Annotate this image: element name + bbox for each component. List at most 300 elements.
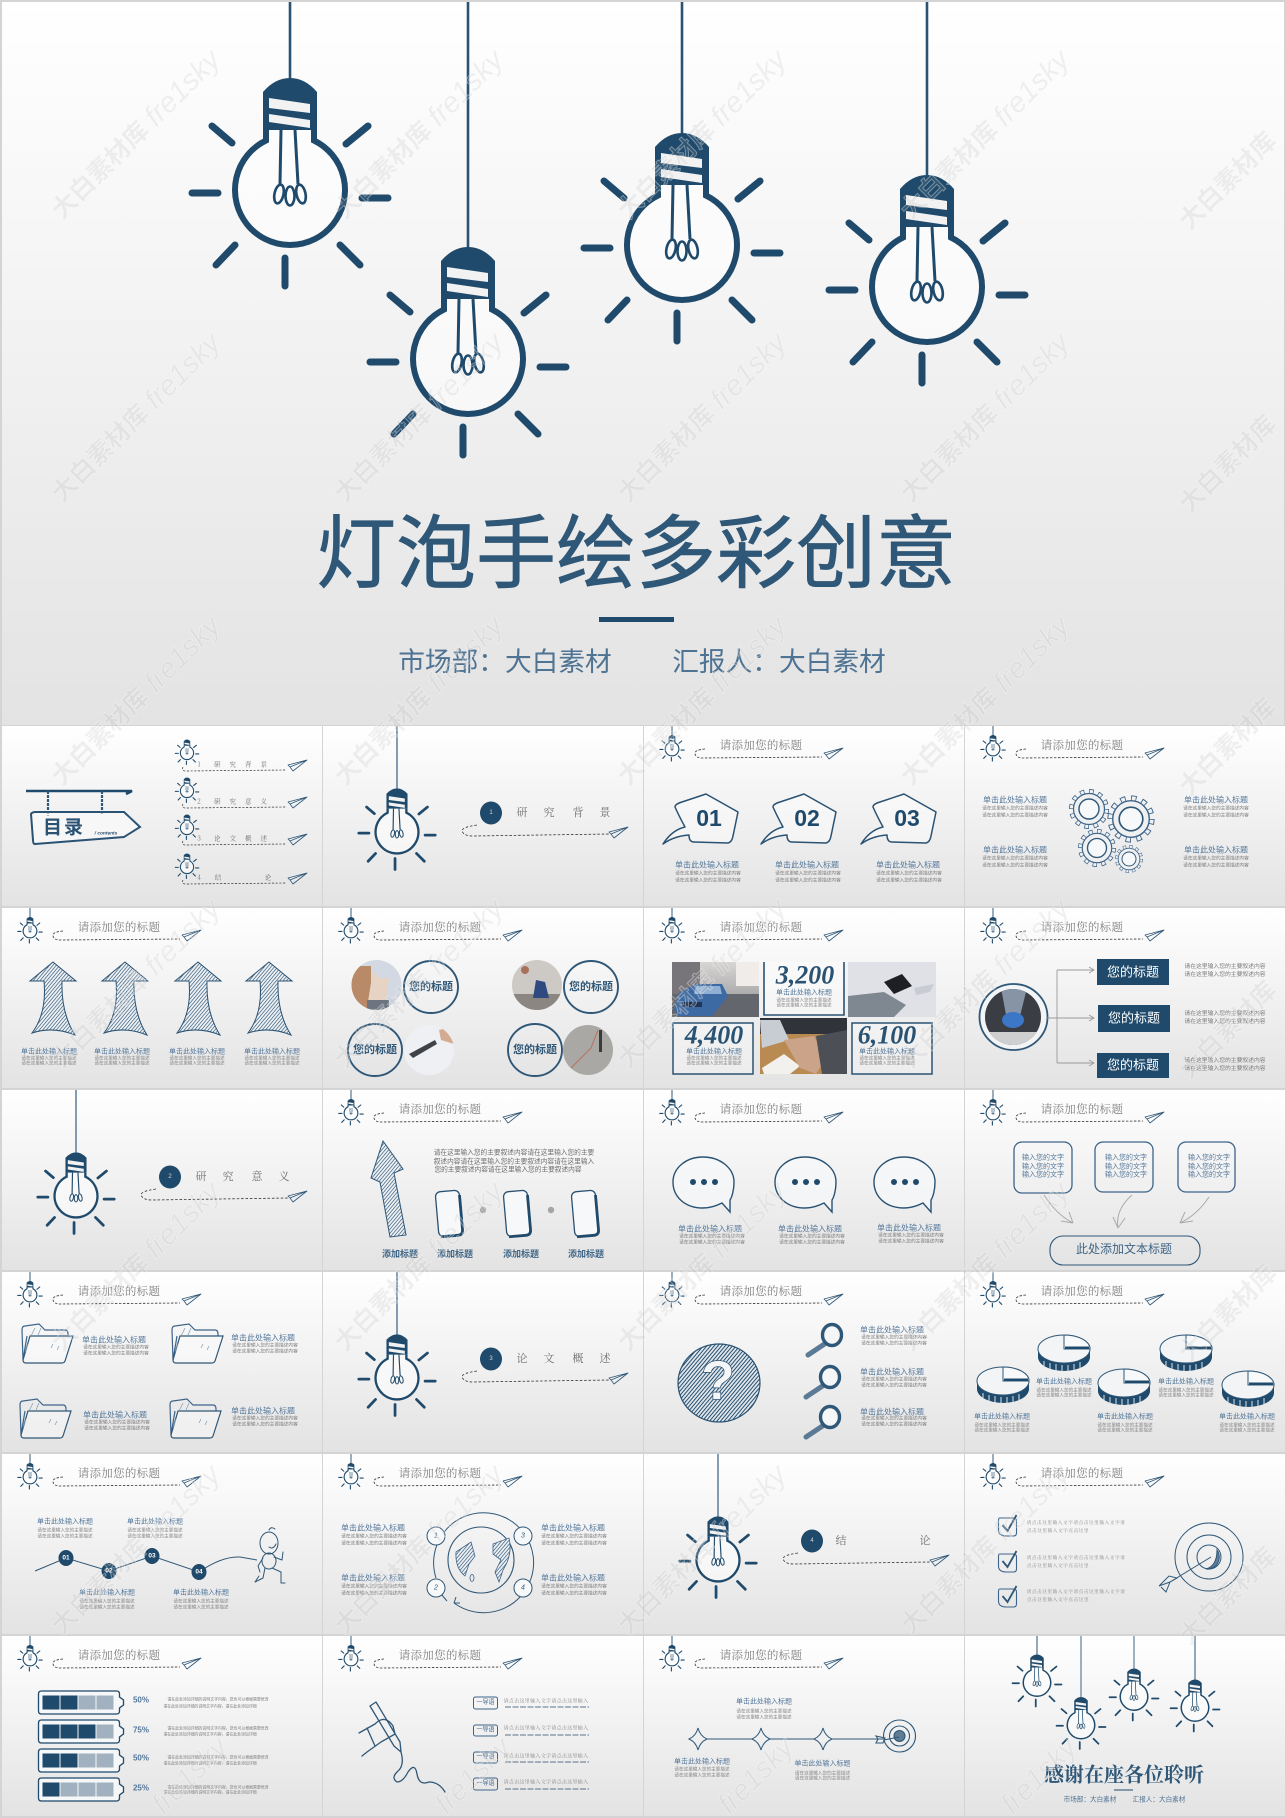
diamond 3 (814, 1728, 832, 1750)
text block 1: 请在这里输入您的主要描述内容 (83, 1350, 149, 1356)
pie text 2: 请在这里输入您的主要描述 (1036, 1392, 1092, 1398)
pie text 1: 请在这里输入您的主要描述 (974, 1422, 1030, 1428)
pie 4 (1160, 1335, 1212, 1371)
text block top: 单击此处输入标题 (736, 1696, 792, 1706)
battery descriptions: 请在此处添加详细的说明文字内容，您也可以根据需要修改 (167, 1696, 269, 1702)
shape 03: 03 (894, 805, 920, 831)
title box 1 (1097, 959, 1169, 985)
pie text 4: 单击此处输入标题 (1158, 1376, 1214, 1386)
watermark overlay: fre1sky (146, 1731, 235, 1818)
node 04: 04 (195, 1568, 203, 1576)
section heading (196, 1168, 290, 1184)
photo 2 (512, 960, 562, 1010)
panel: flow with three titles (965, 908, 1285, 1088)
text block 01: 单击此处输入标题 (37, 1516, 93, 1526)
text block 01: 请在这里输入您的主要描述 (37, 1526, 93, 1534)
section heading (836, 1532, 930, 1548)
percent labels: 25% (133, 1784, 149, 1792)
slide heading: 请添加您的标题 (399, 1465, 481, 1481)
tile 3 (571, 1190, 599, 1237)
list item 3: 一导语 (476, 1752, 495, 1760)
panel: photo circles (323, 908, 643, 1088)
description 2: 请在这里输入您的主要叙述内容 (1184, 1009, 1266, 1017)
battery descriptions: 请在此处添加详细的说明文字内容，请在此处添加详细 (163, 1790, 257, 1794)
slide heading: 请添加您的标题 (399, 1647, 481, 1663)
slide heading: 请添加您的标题 (78, 1283, 160, 1299)
list item 1 (175, 740, 307, 771)
photo 1 (351, 960, 403, 1010)
tile labels: 添加标题 (437, 1248, 473, 1259)
text block top: 请在这里输入您的主要描述 (736, 1714, 792, 1720)
icon: bubble 3 (874, 1157, 935, 1212)
title box 2 (1098, 1005, 1170, 1032)
text block bottom left: 单击此处输入标题 (983, 844, 1047, 854)
stat box 3,200: 请在这里输入您的主要描述 (776, 996, 832, 1004)
section heading: 文 (544, 1350, 554, 1366)
title pill: 此处添加文本标题 (1076, 1241, 1172, 1256)
section heading (516, 1350, 610, 1366)
text block 4: 请在这里输入您的主要描述内容 (232, 1414, 298, 1422)
panel: section 2 (2, 1090, 322, 1270)
text block 3 (860, 1406, 927, 1428)
description 1: 请在这里输入您的主要叙述内容 (1184, 962, 1266, 970)
text block 03: 请在这里输入您的主要描述 (127, 1532, 183, 1540)
text block 1: 请在这里输入您的主要描述内容 (861, 1340, 927, 1346)
panel: question mark (644, 1272, 964, 1452)
pie text 2: 单击此处输入标题 (1036, 1376, 1092, 1386)
icon: arrow 4 (246, 962, 292, 1035)
text block 1: 请在这里输入您的主要描述内容 (679, 1232, 745, 1240)
text block 01 (37, 1516, 93, 1540)
text block 3 (877, 1222, 944, 1244)
title: 灯泡手绘多彩创意 (316, 510, 956, 598)
text block top left: 请在这里输入您的主要描述内容 (982, 812, 1048, 818)
battery descriptions: 请在此处添加详细的说明文字内容，您也可以根据需要修改 (167, 1754, 269, 1760)
panel: closing slide (965, 1636, 1285, 1816)
watermark overlay: 大白素材库 fre1sky (328, 43, 511, 226)
list item 2: 请点击这里输入文字请点击这里输入 (504, 1724, 588, 1732)
icon: check 2 (998, 1551, 1016, 1572)
icon: magnifier 3 (806, 1406, 840, 1437)
box 3: 输入您的文字 (1188, 1170, 1230, 1178)
slide heading: 请添加您的标题 (720, 919, 802, 935)
text block 1: 请在这里输入您的主要描述 (21, 1060, 77, 1066)
icon: bubble 1 (673, 1157, 734, 1212)
title divider (599, 617, 674, 622)
icon: hand and pen (359, 1702, 445, 1792)
slide heading: 请添加您的标题 (78, 1647, 160, 1663)
ring label 1: 您的标题 (409, 979, 453, 993)
text block 1 (21, 1046, 77, 1066)
slide heading: 请添加您的标题 (720, 1283, 802, 1299)
check text 3 (1027, 1588, 1125, 1603)
box 1: 输入您的文字 (1022, 1152, 1064, 1162)
node 01 (58, 1550, 74, 1566)
text block left bottom: 单击此处输入标题 (341, 1572, 405, 1582)
watermark overlay: 大白素材库 (1174, 410, 1282, 518)
stat box 4,400 (673, 1020, 753, 1074)
pie text 2 (1036, 1376, 1092, 1398)
pie text 3: 请在这里输入您的主要描述 (1097, 1422, 1153, 1428)
slide heading: 请添加您的标题 (1041, 1465, 1123, 1481)
text block top right (1183, 794, 1249, 818)
section heading: 结 (836, 1532, 846, 1548)
cycle node 1 (427, 1527, 445, 1545)
list item 3: 请点击这里输入文字请点击这里输入 (504, 1752, 588, 1760)
stat box 4,400: 4,400 (684, 1020, 743, 1050)
text block 1: 请在这里输入您的主要描述内容 (675, 876, 741, 884)
node 03 (144, 1548, 160, 1564)
text block 1: 单击此处输入标题 (82, 1334, 146, 1344)
ring label 2 (564, 961, 618, 1013)
description 2: 请在这里输入您的主要叙述内容 (1184, 1017, 1266, 1025)
icon: target with arrow (1159, 1523, 1243, 1592)
check text 3: 请点击这里输入文字请点击这里输入文字请 (1027, 1588, 1125, 1595)
text block top right: 请在这里输入您的主要描述内容 (1183, 812, 1249, 818)
watermark overlay: 大白素材库 fre1sky (894, 1175, 1077, 1358)
photo: hands on laptop (760, 1018, 847, 1074)
icon: closing bulb 2 (1056, 1636, 1106, 1749)
panel: globe cycle (323, 1454, 643, 1634)
text block 2: 单击此处输入标题 (231, 1332, 295, 1342)
icon: arrow 1 (30, 962, 76, 1035)
watermark overlay: 大白素材库 fre1sky (328, 326, 511, 509)
watermark overlay: 大白素材库 (1174, 693, 1282, 801)
text block left top: 请在这里输入您的主要描述内容 (341, 1532, 407, 1540)
list item 2 (474, 1724, 589, 1736)
slide heading: 请添加您的标题 (399, 919, 481, 935)
battery 50% lower (38, 1749, 124, 1772)
node 02: 02 (105, 1568, 113, 1574)
ring label 4: 您的标题 (513, 1042, 557, 1056)
section heading (516, 804, 610, 820)
battery descriptions: 请在此处添加详细的说明文字内容，请在此处添加详细 (163, 1704, 257, 1708)
text block top left (982, 794, 1048, 818)
tile labels: 添加标题 (568, 1248, 604, 1259)
text block bottom left: 请在这里输入您的主要描述内容 (982, 854, 1048, 862)
section heading: 研 (516, 804, 528, 820)
text block 3: 单击此处输入标题 (169, 1046, 225, 1056)
text block 3: 请在这里输入您的主要描述内容 (878, 1232, 944, 1238)
pie 5 (1222, 1371, 1274, 1407)
watermark overlay: 大白素材库 fre1sky (328, 1458, 511, 1641)
pie text 3: 请在这里输入您的主要描述 (1097, 1426, 1153, 1434)
watermark overlay: 大白素材库 fre1sky (328, 609, 511, 792)
section heading: 义 (278, 1168, 290, 1184)
box 2 (1095, 1142, 1153, 1192)
section heading: 述 (600, 1350, 610, 1366)
battery 25% (38, 1778, 124, 1801)
list item 2: 一导语 (476, 1726, 495, 1734)
text block 2 (775, 860, 841, 884)
cycle node 2: 2 (433, 1584, 438, 1592)
connector arrows (1046, 967, 1094, 1066)
text block right (794, 1758, 850, 1782)
icon: check 1 (998, 1515, 1016, 1536)
node 01: 01 (62, 1554, 70, 1562)
watermark overlay: 大白素材库 fre1sky (45, 1175, 228, 1358)
text block 3 (169, 1046, 225, 1066)
icon: hanging bulb 1 (192, 2, 388, 286)
watermark overlay: 大白素材库 fre1sky (611, 1175, 794, 1358)
node 02 (102, 1563, 116, 1579)
icon: hanging bulb 3 (584, 2, 780, 341)
text block 1: 请在这里输入您的主要描述内容 (83, 1344, 149, 1350)
text block 1: 请在这里输入您的主要描述内容 (861, 1334, 927, 1340)
text block 1: 单击此处输入标题 (860, 1324, 924, 1334)
section heading: 研 (196, 1168, 206, 1184)
stat box 6,100: 单击此处输入标题 (859, 1046, 915, 1056)
wave line (35, 1556, 257, 1572)
text block 2: 请在这里输入您的主要描述 (94, 1060, 150, 1066)
node 03: 03 (148, 1552, 156, 1560)
text block top left: 请在这里输入您的主要描述内容 (982, 804, 1048, 812)
icon: hanging bulb 2 (370, 2, 566, 455)
watermark overlay: fre1sky (429, 1731, 518, 1818)
list item 4: 结 (215, 872, 222, 882)
battery descriptions: 请在此处添加详细的说明文字内容，您也可以根据需要修改 (167, 1784, 269, 1790)
text block 3: 请在这里输入您的主要描述内容 (876, 876, 942, 884)
text block 2: 单击此处输入标题 (778, 1224, 842, 1234)
section heading: 论 (920, 1532, 930, 1548)
text block 3: 请在这里输入您的主要描述内容 (84, 1418, 150, 1426)
box 3 (1178, 1142, 1235, 1192)
panel: section 4 (644, 1454, 964, 1634)
section heading: 意 (252, 1168, 262, 1184)
text block 1 (678, 1224, 745, 1246)
text block right top: 请在这里输入您的主要描述内容 (541, 1532, 607, 1540)
text block 3: 请在这里输入您的主要描述内容 (861, 1420, 927, 1428)
list item 3 (474, 1752, 589, 1763)
watermark overlay: 大白素材库 fre1sky (894, 892, 1077, 1075)
text block 2: 单击此处输入标题 (94, 1046, 150, 1056)
title box 3 (1097, 1053, 1169, 1078)
watermark overlay: 大白素材库 (1174, 1542, 1282, 1650)
check text 2: 点击这里输入文字点击这里 (1027, 1562, 1089, 1569)
cycle node 2 (427, 1579, 445, 1597)
text block 04 (173, 1588, 229, 1610)
check text 2 (1027, 1554, 1125, 1569)
list item 3 (175, 815, 307, 845)
description 3: 请在这里输入您的主要叙述内容 (1184, 1056, 1266, 1064)
text block right top: 请在这里输入您的主要描述内容 (541, 1540, 607, 1546)
description 1: 请在这里输入您的主要叙述内容 (1184, 970, 1266, 978)
shape 01: 01 (696, 805, 722, 831)
text block top right: 单击此处输入标题 (1184, 794, 1248, 804)
text block bottom left: 请在这里输入您的主要描述内容 (982, 862, 1048, 868)
box 3: 输入您的文字 (1188, 1162, 1230, 1170)
icon: bubble 2 (775, 1157, 836, 1212)
watermark overlay: 大白素材库 fre1sky (894, 326, 1077, 509)
text block 4: 请在这里输入您的主要描述 (244, 1054, 300, 1062)
panel: gears (965, 726, 1285, 906)
text block left bottom: 请在这里输入您的主要描述内容 (341, 1582, 407, 1590)
stat box 3,200: 请在这里输入您的主要描述 (776, 1002, 832, 1008)
text block 2: 请在这里输入您的主要描述内容 (232, 1342, 298, 1348)
icon: folder 1 (22, 1324, 73, 1363)
text block 2: 单击此处输入标题 (775, 860, 839, 870)
check text 1 (1027, 1519, 1125, 1534)
icon: check 3 (998, 1586, 1016, 1607)
text block 3 (876, 860, 942, 884)
text block 3: 请在这里输入您的主要描述内容 (861, 1414, 927, 1422)
check text 3: 点击这里输入文字点击这里 (1027, 1596, 1089, 1603)
text block 04: 请在这里输入您的主要描述 (173, 1604, 229, 1610)
panel: section 3 (323, 1272, 643, 1452)
watermark overlay: 大白素材库 fre1sky (45, 1458, 228, 1641)
text block top left: 单击此处输入标题 (983, 794, 1047, 804)
list item 4: 4 (197, 872, 201, 882)
watermark overlay: 大白素材库 fre1sky (45, 43, 228, 226)
photo: tablet (848, 962, 936, 1017)
battery descriptions: 请在此处添加详细的说明文字内容，您也可以根据需要修改 (167, 1726, 269, 1730)
text block bottom left (982, 844, 1048, 868)
icon: folder 3 (20, 1399, 71, 1438)
watermark overlay: 大白素材库 (1174, 976, 1282, 1084)
diamond 2 (752, 1728, 770, 1750)
list item 4 (175, 854, 307, 884)
panel: contents slide (2, 726, 322, 906)
text block 2: 请在这里输入您的主要描述内容 (232, 1348, 298, 1354)
closing divider (1114, 1790, 1133, 1791)
text block 03: 请在这里输入您的主要描述 (127, 1526, 183, 1534)
box 3: 输入您的文字 (1188, 1152, 1230, 1162)
slide heading: 请添加您的标题 (399, 1101, 481, 1117)
pie text 1: 请在这里输入您的主要描述 (974, 1426, 1030, 1434)
photo 3 (404, 1025, 454, 1075)
text block 04: 单击此处输入标题 (173, 1588, 229, 1596)
battery descriptions: 请在此处添加详细的说明文字内容，请在此处添加详细 (163, 1760, 257, 1766)
box 1: 输入您的文字 (1022, 1170, 1064, 1178)
watermark overlay: 大白素材库 fre1sky (611, 1458, 794, 1641)
slide heading: 请添加您的标题 (720, 737, 802, 753)
photo circle (980, 984, 1048, 1050)
pie text 5: 请在这里输入您的主要描述 (1219, 1422, 1275, 1428)
ring label 3: 您的标题 (353, 1042, 397, 1056)
text block 3: 请在这里输入您的主要描述内容 (84, 1424, 150, 1432)
check text 2: 请点击这里输入文字请点击这里输入文字请 (1027, 1554, 1125, 1561)
pie text 3 (1097, 1412, 1153, 1434)
text block 02 (79, 1588, 135, 1610)
section heading: 背 (572, 804, 584, 820)
watermark overlay: 大白素材库 fre1sky (45, 326, 228, 509)
text block 1: 请在这里输入您的主要描述内容 (675, 870, 741, 876)
panel: photo and number grid (644, 908, 964, 1088)
dot 1 (480, 1207, 486, 1213)
cycle node 4 (514, 1579, 532, 1597)
stat box 4,400: 单击此处输入标题 (686, 1046, 742, 1056)
pie 1 (977, 1367, 1029, 1403)
panel: batteries (2, 1636, 322, 1816)
section heading: 景 (600, 804, 610, 820)
shape 03 (861, 794, 936, 844)
text block left bottom (341, 1572, 407, 1596)
section heading: 究 (544, 804, 554, 820)
watermark overlay: 大白素材库 fre1sky (45, 892, 228, 1075)
panel: hatched arrows (2, 908, 322, 1088)
stat box 6,100: 请在这里输入您的主要描述 (859, 1060, 915, 1066)
box 2: 输入您的文字 (1105, 1170, 1147, 1178)
stat box 3,200 (764, 960, 844, 1015)
list item 1: 请点击这里输入文字请点击这里输入 (504, 1698, 588, 1704)
panel: 3D arrow and tiles (323, 1090, 643, 1270)
pie text 4: 请在这里输入您的主要描述 (1158, 1392, 1214, 1398)
pie text 3: 单击此处输入标题 (1097, 1412, 1153, 1420)
closing subtitle: reporter: 汇报人：大白素材 (1133, 1794, 1186, 1804)
text block 3 (83, 1410, 150, 1432)
percent labels: 50% (133, 1754, 149, 1762)
text block left: 请在这里输入您的主要描述 (674, 1772, 730, 1778)
text block 1 (675, 860, 741, 884)
slide heading: 请添加您的标题 (78, 1465, 160, 1481)
text block 2 (778, 1224, 845, 1246)
text block 1: 单击此处输入标题 (678, 1224, 742, 1234)
watermark overlay: 大白素材库 fre1sky (45, 609, 228, 792)
text block 4 (231, 1406, 298, 1428)
panel: speech bubbles (644, 1090, 964, 1270)
pie text 2: 请在这里输入您的主要描述 (1036, 1386, 1092, 1394)
icon: folder 4 (170, 1399, 221, 1438)
icon: hanging sign: / contents (94, 830, 118, 836)
text block 1 (82, 1334, 149, 1356)
text block right: 请在这里输入您的主要描述 (795, 1770, 850, 1776)
text block 2: 请在这里输入您的主要描述 (94, 1054, 150, 1062)
slide heading: 请添加您的标题 (720, 1647, 802, 1663)
list item 1: 一导语 (476, 1698, 495, 1706)
box 1 (1014, 1142, 1072, 1193)
stat box 6,100: 请在这里输入您的主要描述 (859, 1054, 915, 1062)
box 2: 输入您的文字 (1105, 1152, 1147, 1162)
text block 1 (860, 1324, 927, 1346)
icon: arrow 2 (102, 962, 148, 1035)
list item 4: 一导语 (476, 1779, 495, 1787)
watermark overlay: 大白素材库 fre1sky (894, 1458, 1077, 1641)
title box 3: 您的标题 (1107, 1058, 1159, 1072)
percent labels (133, 1696, 149, 1792)
icon: arrow 3 (175, 962, 221, 1035)
list item 2 (175, 778, 307, 808)
pie text 4: 请在这里输入您的主要描述 (1158, 1386, 1214, 1394)
text block 3: 单击此处输入标题 (860, 1406, 924, 1416)
text block 2 (94, 1046, 150, 1066)
text block bottom right: 请在这里输入您的主要描述内容 (1183, 854, 1249, 862)
text block 1: 请在这里输入您的主要描述 (21, 1054, 77, 1062)
watermark overlay: 大白素材库 fre1sky (894, 609, 1077, 792)
text block 1: 单击此处输入标题 (675, 860, 739, 870)
panel: folders (2, 1272, 322, 1452)
text block 4: 请在这里输入您的主要描述 (244, 1060, 300, 1066)
ring label 4 (508, 1024, 562, 1076)
stat box 6,100 (852, 1020, 932, 1074)
text block right: 单击此处输入标题 (794, 1758, 850, 1768)
cycle node 3 (514, 1527, 532, 1545)
box 2: 输入您的文字 (1105, 1162, 1147, 1170)
icon: gears (1072, 792, 1151, 871)
watermark overlay: 大白素材库 fre1sky (611, 892, 794, 1075)
text block right bottom (541, 1572, 607, 1596)
list item 2: 2 (197, 796, 201, 806)
photo 4 (563, 1025, 613, 1075)
text block bottom right: 请在这里输入您的主要描述内容 (1183, 862, 1249, 868)
icon: folder 2 (172, 1324, 223, 1363)
description 1 (1184, 962, 1266, 978)
pie 2 (1038, 1335, 1090, 1371)
text block right: 请在这里输入您的主要描述 (795, 1774, 850, 1782)
watermark overlay: 大白素材库 (1174, 127, 1282, 235)
text block 3: 请在这里输入您的主要描述内容 (876, 870, 942, 876)
text block 2: 请在这里输入您的主要描述内容 (861, 1382, 927, 1388)
cycle node 1: 1 (434, 1532, 438, 1540)
